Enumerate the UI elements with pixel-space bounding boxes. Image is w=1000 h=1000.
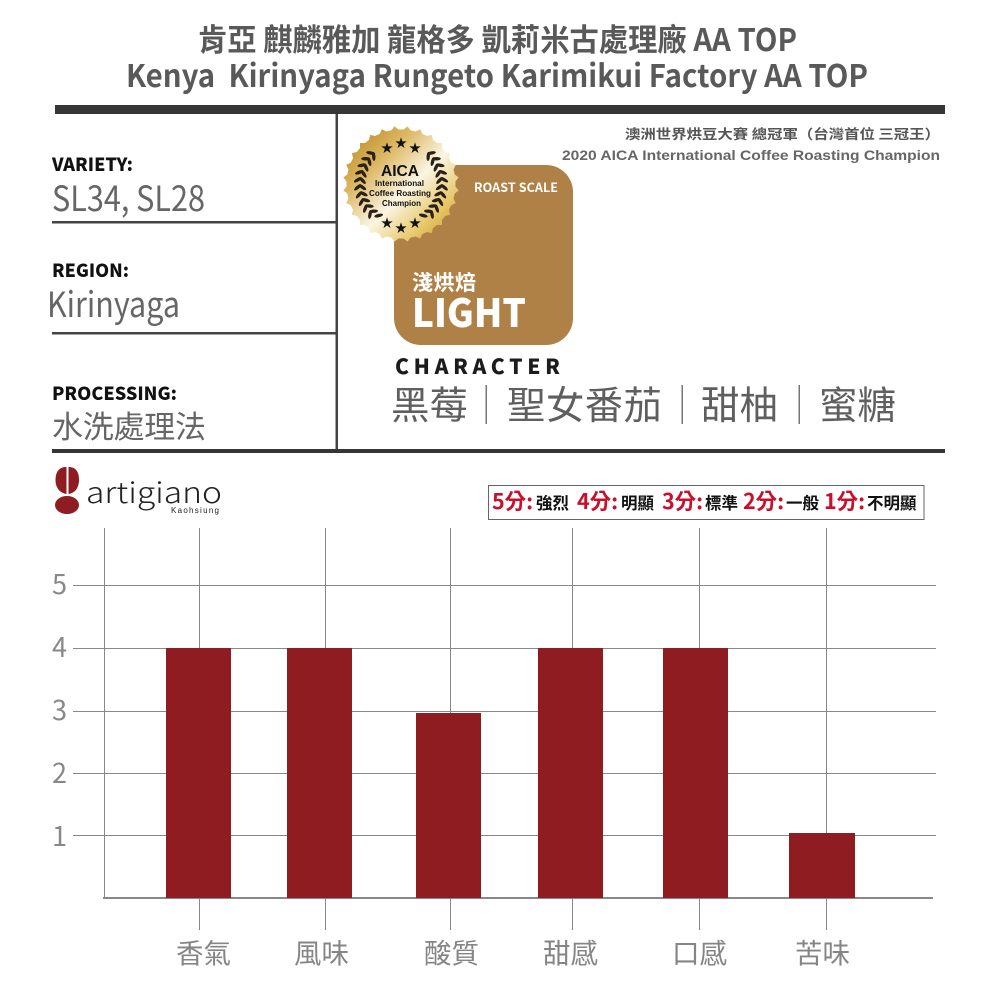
category labels: 甜感 bbox=[543, 931, 598, 971]
y axis labels: 2 bbox=[52, 752, 67, 791]
legend: 1分: bbox=[824, 485, 865, 516]
icon: AICA gold badge: ★ bbox=[395, 219, 407, 236]
champion text: 2020 AICA International Coffee Roasting Champion bbox=[562, 148, 940, 164]
flavour notes bbox=[391, 375, 896, 431]
category labels: 口感 bbox=[672, 931, 727, 971]
y axis labels: 5 bbox=[52, 563, 67, 602]
heading: character: CHARACTER bbox=[395, 351, 560, 381]
title: English: Kenya Kirinyaga Rungeto Karimikui Factory AA TOP bbox=[126, 51, 868, 96]
flavour notes: 黑莓 bbox=[391, 375, 468, 431]
icon: AICA gold badge: ★ bbox=[395, 134, 407, 151]
flavour notes: 聖女番茄 bbox=[507, 375, 662, 431]
legend: 3分: bbox=[662, 485, 703, 516]
legend: 2分: bbox=[743, 485, 784, 516]
panel: processing: PROCESSING: bbox=[52, 380, 177, 406]
y axis labels: 4 bbox=[52, 626, 67, 665]
title: Chinese: 肯亞 麒麟雅加 龍格多 凱莉米古處理廠 AA TOP bbox=[198, 15, 797, 60]
panel: processing: 水洗處理法 bbox=[52, 402, 206, 447]
category labels bbox=[176, 931, 850, 971]
flavour notes: 甜柚 bbox=[701, 375, 778, 431]
legend: 明顯 bbox=[621, 490, 654, 514]
category labels: 香氣 bbox=[176, 931, 231, 971]
panel: variety: VARIETY: bbox=[51, 151, 133, 177]
category labels: 風味 bbox=[294, 931, 349, 971]
bar chart bbox=[52, 528, 936, 971]
info panel frame bbox=[52, 114, 945, 453]
legend: 4分: bbox=[577, 485, 618, 516]
legend: 一般 bbox=[786, 490, 820, 514]
roast scale card: LIGHT bbox=[412, 283, 526, 339]
logo: artigiano bbox=[55, 467, 222, 515]
legend: 5分: bbox=[492, 485, 533, 516]
header bar bbox=[55, 105, 945, 114]
logo: artigiano: Kaohsiung bbox=[171, 506, 219, 515]
roast scale card: ROAST SCALE bbox=[474, 177, 558, 196]
icon: AICA gold badge: ★ bbox=[409, 139, 421, 156]
legend: 標準 bbox=[705, 490, 738, 514]
bars bbox=[166, 648, 855, 898]
y axis labels bbox=[52, 563, 67, 854]
legend: 不明顯 bbox=[867, 490, 917, 514]
panel: variety: SL34, SL28 bbox=[52, 171, 205, 222]
y axis labels: 1 bbox=[52, 815, 67, 854]
panel: variety bbox=[51, 151, 205, 222]
category labels: 酸質 bbox=[424, 931, 479, 971]
roast scale card bbox=[394, 165, 573, 345]
category labels: 苦味 bbox=[795, 931, 850, 971]
icon: AICA gold badge: ★ bbox=[409, 214, 421, 231]
icon: AICA gold badge: Coffee Roasting bbox=[369, 189, 431, 198]
panel: region bbox=[47, 257, 180, 328]
champion text bbox=[562, 123, 940, 164]
panel: region: Kirinyaga bbox=[47, 277, 180, 328]
legend bbox=[488, 485, 924, 520]
champion text: 澳洲世界烘豆大賽 總冠軍（台灣首位 三冠王） bbox=[625, 123, 940, 143]
roast scale card: 淺烘焙 bbox=[412, 267, 476, 297]
icon: AICA gold badge: AICA bbox=[381, 163, 419, 180]
legend: 強烈 bbox=[536, 490, 570, 514]
icon: AICA gold badge: ★ bbox=[381, 139, 393, 156]
icon: AICA gold badge: ★ bbox=[381, 214, 393, 231]
icon: AICA gold badge bbox=[344, 126, 458, 242]
flavour notes: 蜜糖 bbox=[819, 375, 896, 431]
y axis labels: 3 bbox=[52, 689, 67, 728]
icon: AICA gold badge: International bbox=[375, 179, 424, 188]
panel: region: REGION: bbox=[52, 257, 129, 283]
panel: processing bbox=[52, 380, 206, 447]
logo: artigiano: artigiano bbox=[86, 470, 222, 512]
icon: AICA gold badge: Champion bbox=[382, 199, 421, 208]
